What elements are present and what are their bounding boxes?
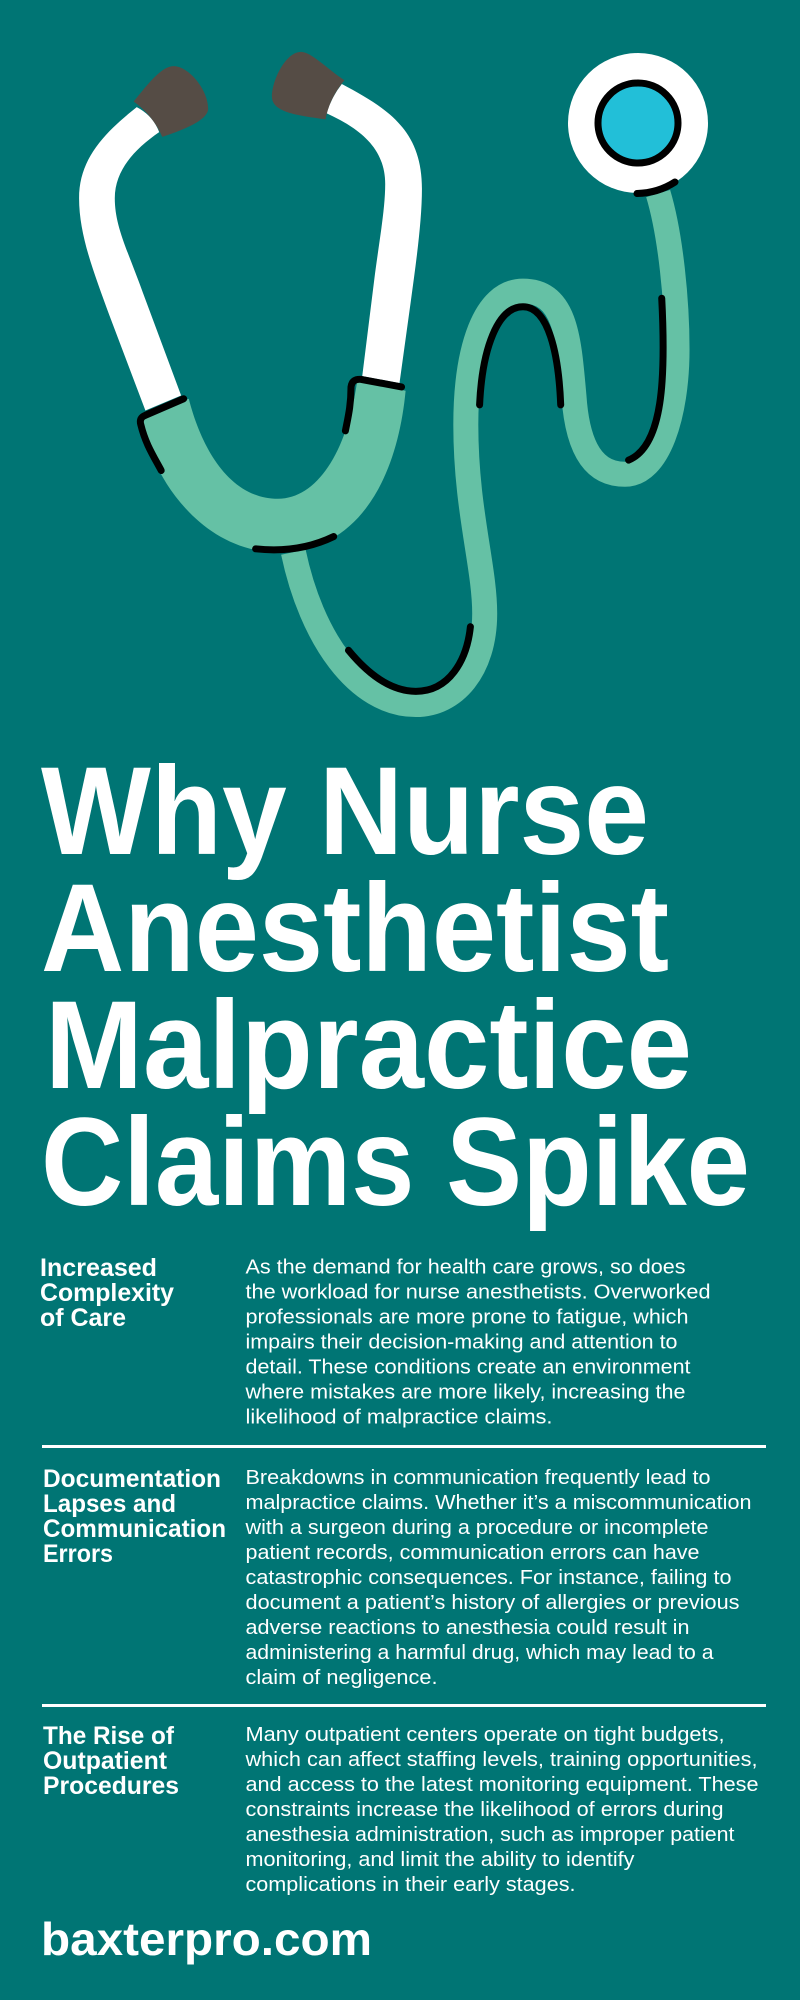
title [41, 742, 750, 1232]
left white ear tube [79, 107, 181, 411]
left earpiece [134, 66, 208, 137]
section 1 heading: of Care [40, 1304, 126, 1332]
section 2 text: document a patient’s history of allergies or previous [246, 1592, 740, 1614]
section 2 heading: Lapses and [43, 1490, 176, 1518]
section 1 heading [40, 1254, 174, 1332]
tube: green Y junction [140, 381, 406, 552]
section 3 text: Many outpatient centers operate on tight budgets, [246, 1724, 724, 1746]
title: Anesthetist [41, 859, 669, 998]
section 3 text [244, 1724, 758, 1896]
right white ear tube [327, 84, 422, 383]
section 2 text: patient records, communication errors can have [246, 1542, 700, 1564]
title: Why Nurse [41, 742, 649, 881]
section 3 heading: Procedures [43, 1772, 179, 1800]
section 2 text: adverse reactions to anesthesia could result in [246, 1617, 690, 1639]
section 2 text: catastrophic consequences. For instance, failing to [246, 1567, 732, 1589]
footer: website: baxterpro.com [41, 1913, 372, 1965]
section 2 text: claim of negligence. [246, 1667, 438, 1689]
section 1 text: where mistakes are more likely, increasing the [244, 1382, 685, 1404]
section 3 text: complications in their early stages. [246, 1874, 576, 1896]
section 2 text: administering a harmful drug, which may lead to a [246, 1642, 714, 1664]
icon: chest piece [568, 53, 708, 194]
title: Malpractice [45, 976, 692, 1115]
section 2 text: malpractice claims. Whether it’s a miscommunication [246, 1492, 752, 1514]
section 2 heading [43, 1465, 226, 1568]
section 1 text: professionals are more prone to fatigue, which [246, 1306, 688, 1328]
section 3 text: constraints increase the likelihood of errors during [246, 1799, 724, 1821]
section 1 text [244, 1256, 710, 1428]
section 3 text: monitoring, and limit the ability to identify [246, 1849, 634, 1871]
black outline strokes [140, 298, 663, 691]
section 2 heading: Errors [43, 1540, 113, 1568]
section 1 heading: Increased [40, 1254, 157, 1282]
section 1 heading: Complexity [40, 1279, 174, 1307]
section 2 text: with a surgeon during a procedure or incomplete [244, 1517, 709, 1539]
section 2 heading: Communication [43, 1515, 226, 1543]
illustration: stethoscope [79, 52, 677, 705]
section 1 text: the workload for nurse anesthetists. Overworked [246, 1282, 710, 1304]
section 2 heading: Documentation [43, 1465, 221, 1493]
section 3 heading: Outpatient [43, 1747, 168, 1775]
section 3 heading: The Rise of [43, 1722, 175, 1750]
section 3 heading [43, 1722, 179, 1800]
section 1 text: detail. These conditions create an environment [246, 1356, 691, 1378]
section 1 text: likelihood of malpractice claims. [246, 1406, 552, 1428]
right earpiece [272, 52, 344, 119]
section 1 text: As the demand for health care grows, so does [246, 1256, 686, 1278]
tube: long green tubing [293, 193, 677, 705]
section 2 text: Breakdowns in communication frequently lead to [246, 1467, 710, 1489]
section 3 text: which can affect staffing levels, training opportunities, [244, 1749, 757, 1771]
section 1 text: impairs their decision-making and attention to [246, 1332, 678, 1354]
section 2 text [244, 1467, 752, 1689]
title: Claims Spike [41, 1093, 750, 1232]
section 3 text: anesthesia administration, such as improper patient [246, 1824, 735, 1846]
section 3 text: and access to the latest monitoring equipment. These [246, 1774, 758, 1796]
